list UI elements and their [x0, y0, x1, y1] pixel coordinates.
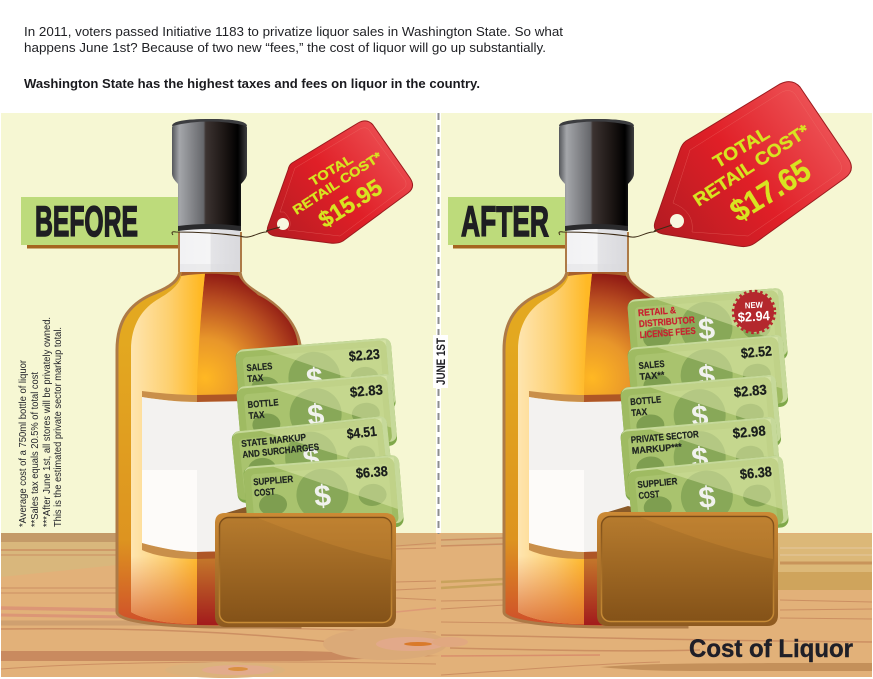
bill: private sector markup: MARKUP*** — [631, 442, 682, 457]
divider label: June 1st: JUNE 1ST — [436, 338, 448, 385]
price tag: before: RETAIL COST* — [290, 148, 385, 217]
bill: private sector markup: $2.98 — [732, 422, 766, 441]
wallet: after — [597, 512, 778, 626]
bill: retail and distributor license fees: RETAIL & — [638, 305, 677, 319]
divider: dashed line — [438, 113, 440, 534]
bill: supplier cost: $ — [313, 479, 332, 513]
bill: private sector markup — [620, 416, 782, 502]
bill: sales tax: TAX — [247, 373, 264, 385]
price tag: before: $15.95 — [314, 174, 387, 233]
footnotes — [17, 317, 64, 527]
bill: retail and distributor license fees — [627, 288, 788, 372]
bill: retail and distributor license fees: DISTRIBUTOR — [639, 315, 695, 330]
bills: before — [231, 338, 404, 539]
bill: bottle tax after: $2.83 — [733, 381, 768, 400]
bill: bottle tax after: TAX — [631, 407, 648, 419]
bill: supplier cost after: $6.38 — [739, 463, 773, 482]
bottle: before — [117, 119, 300, 627]
wooden table — [1, 533, 872, 678]
bill: bottle tax after: $ — [690, 399, 710, 434]
footnotes: ***After June 1st, all stores will be privately owned. — [41, 317, 53, 527]
bill: supplier cost after — [627, 455, 789, 542]
bill: supplier cost — [243, 455, 404, 539]
price tag: after — [559, 82, 851, 247]
banner: after — [448, 197, 568, 248]
banner: after: AFTER — [461, 198, 549, 246]
bill: private sector markup: $ — [690, 441, 710, 476]
bill: sales tax after: SALES — [638, 359, 665, 372]
footnotes: **Sales tax equals 20.5% of total cost — [29, 372, 41, 527]
badge: new fee: NEW — [745, 299, 764, 310]
bill: supplier cost after: SUPPLIER — [637, 476, 678, 491]
bill: sales tax after — [627, 334, 789, 420]
wallet back: before — [215, 507, 270, 530]
bill: bottle tax after — [620, 374, 782, 460]
wallet: before — [215, 513, 396, 627]
intro text: happens June 1st? Because of two new “fees,” the cost of liquor will go up substantially. — [24, 40, 546, 55]
footnotes: *Average cost of a 750ml bottle of liquor — [17, 360, 29, 527]
bill: bottle tax: $ — [306, 398, 326, 433]
bill: sales tax after: $ — [697, 359, 717, 394]
bill: supplier cost after: $ — [697, 481, 717, 515]
bill: sales tax: $2.23 — [348, 346, 381, 364]
price tag: after: RETAIL COST* — [690, 121, 813, 210]
badge: new fee: $2.94 — [737, 308, 771, 325]
panel: before background — [1, 113, 436, 534]
bill: sales tax: $ — [305, 362, 324, 396]
chart title: Cost of Liquor: Cost of Liquor — [689, 635, 853, 663]
bill: retail and distributor license fees: $ — [697, 312, 716, 346]
bill: sales tax after: $2.52 — [740, 342, 773, 361]
bill: state markup and surcharges: AND SURCHARGES — [242, 442, 320, 461]
price tag: before — [172, 121, 413, 243]
bill: supplier cost: $6.38 — [355, 463, 389, 481]
intro bold statement: Washington State has the highest taxes and fees on liquor in the country. — [24, 76, 480, 91]
footnotes: This is the estimated private sector markup total. — [52, 327, 64, 527]
price tag: after: TOTAL — [710, 123, 773, 172]
bill: supplier cost: SUPPLIER — [253, 474, 294, 488]
bill: retail and distributor license fees: LICENSE FEES — [639, 326, 696, 341]
bills: after — [620, 288, 789, 542]
bottle: after — [504, 119, 687, 627]
bill: sales tax: SALES — [246, 361, 273, 374]
badge: new fee — [734, 292, 774, 332]
bill: state markup and surcharges: $ — [301, 442, 322, 477]
bill: state markup and surcharges — [231, 416, 394, 504]
bill: sales tax — [235, 338, 396, 422]
bill: supplier cost: COST — [254, 487, 276, 499]
wallet back: after — [597, 506, 652, 530]
bill: bottle tax after: BOTTLE — [630, 394, 662, 408]
price tag: before: TOTAL — [307, 151, 356, 189]
banner: before: BEFORE — [35, 198, 138, 246]
bill: bottle tax: $2.83 — [349, 381, 384, 400]
intro text: In 2011, voters passed Initiative 1183 to privatize liquor sales in Washington State. So what — [24, 24, 563, 39]
panel: after background — [441, 113, 872, 534]
bill: bottle tax: TAX — [248, 410, 266, 422]
bill: bottle tax — [236, 373, 398, 459]
bill: state markup and surcharges: STATE MARKUP — [241, 432, 307, 450]
bill: sales tax after: TAX** — [639, 370, 665, 383]
bill: bottle tax: BOTTLE — [247, 397, 279, 411]
bill: supplier cost after: COST — [638, 489, 660, 502]
bill: private sector markup: PRIVATE SECTOR — [630, 429, 699, 446]
price tag: after: $17.65 — [724, 152, 817, 229]
bill: state markup and surcharges: $4.51 — [346, 423, 378, 442]
intro text — [24, 24, 563, 55]
